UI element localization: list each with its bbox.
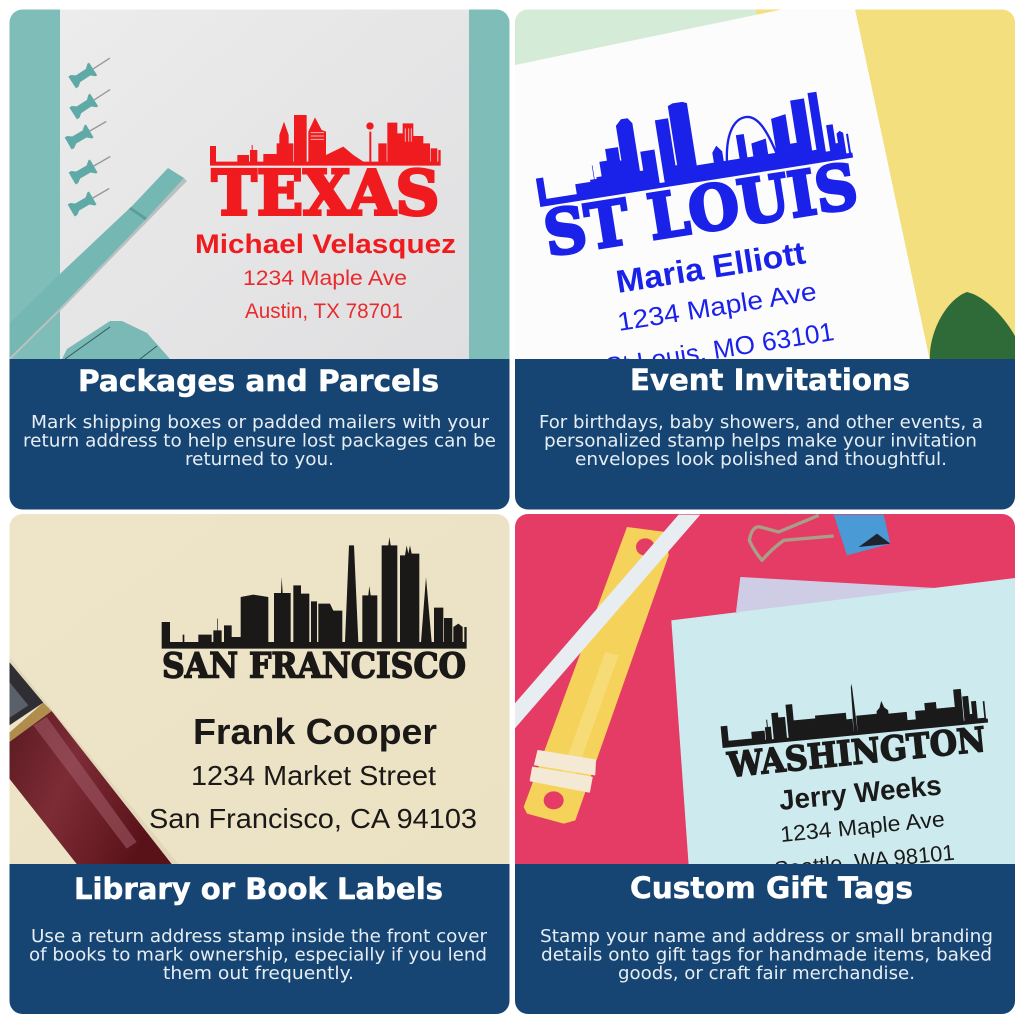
stamp: name: Maria Elliott <box>613 234 808 300</box>
stamp: street: 1234 Maple Ave <box>615 276 818 337</box>
caption panel <box>515 864 1016 1015</box>
body text: personalized stamp helps make your invitation <box>544 432 977 452</box>
stamp: city: Austin, TX 78701 <box>245 300 403 323</box>
photo: card on yellow and mint background <box>515 9 1016 361</box>
icon: green leaf <box>930 292 1015 361</box>
body text <box>29 927 488 984</box>
stamp: San Francisco wordmark: SAN FRANCISCO <box>162 646 466 686</box>
lilac paper <box>736 577 935 612</box>
body text <box>540 927 993 984</box>
blue paper tag <box>671 578 1015 865</box>
stamp: street: 1234 Maple Ave <box>779 806 946 847</box>
body text: returned to you. <box>185 450 334 470</box>
caption panel <box>515 359 1016 510</box>
body text: Use a return address stamp inside the front cover <box>31 927 488 947</box>
body text <box>23 413 496 470</box>
icon: stapler <box>62 321 170 359</box>
photo: desk with paper, pins and pen <box>9 9 510 361</box>
heading: Library or Book Labels <box>74 872 443 906</box>
stamp: St Louis skyline <box>536 92 854 207</box>
stamp: Washington skyline <box>718 671 988 748</box>
photo: tags and clips on pink background <box>515 514 1016 866</box>
body text: them out frequently. <box>163 964 354 984</box>
caption panel <box>9 359 510 510</box>
body text: Mark shipping boxes or padded mailers with your <box>31 413 490 433</box>
icon: fountain pen <box>9 657 178 864</box>
stamp: St Louis wordmark: ST LOUIS <box>539 149 862 271</box>
photo: cream paper with fountain pen <box>9 514 510 866</box>
stamp: city: San Francisco, CA 94103 <box>149 803 477 834</box>
stamp: street: 1234 Maple Ave <box>243 267 407 290</box>
stamp: Texas wordmark: TEXAS <box>212 156 440 230</box>
body text: return address to help ensure lost packages can be <box>23 432 496 452</box>
icon: binder clip <box>749 515 890 560</box>
stamp: Texas skyline <box>210 115 441 166</box>
stamp: city: Seattle, WA 98101 <box>773 840 956 882</box>
body text: of books to mark ownership, especially if you lend <box>29 946 487 966</box>
stamp: street: 1234 Market Street <box>191 760 436 791</box>
body text: details onto gift tags for handmade items, baked <box>541 946 992 966</box>
stamp: name: Jerry Weeks <box>778 769 943 816</box>
stamp: name: Frank Cooper <box>193 711 437 752</box>
stamp: city: St Louis, MO 63101 <box>603 316 836 382</box>
panel: packages and parcels <box>9 9 510 510</box>
heading: Event Invitations <box>630 363 910 397</box>
stamp: name: Michael Velasquez <box>195 229 456 259</box>
panel: library or book labels <box>9 514 510 1015</box>
body text: envelopes look polished and thoughtful. <box>575 450 947 470</box>
icon: push pins <box>64 58 110 216</box>
heading: Custom Gift Tags <box>630 871 913 905</box>
body text <box>539 413 983 470</box>
body text: For birthdays, baby showers, and other events, a <box>539 413 983 433</box>
panel: custom gift tags <box>515 514 1016 1015</box>
heading: Packages and Parcels <box>78 364 439 398</box>
icon: white strip <box>515 515 700 729</box>
body text: Stamp your name and address or small branding <box>540 927 993 947</box>
panel: event invitations <box>515 9 1016 510</box>
stamp: San Francisco skyline <box>162 537 467 649</box>
caption panel <box>9 864 510 1015</box>
icon: yellow fastener <box>524 527 669 824</box>
stamp: Washington wordmark: WASHINGTON <box>725 720 988 786</box>
body text: goods, or craft fair merchandise. <box>618 964 915 984</box>
icon: teal pen <box>9 168 187 361</box>
